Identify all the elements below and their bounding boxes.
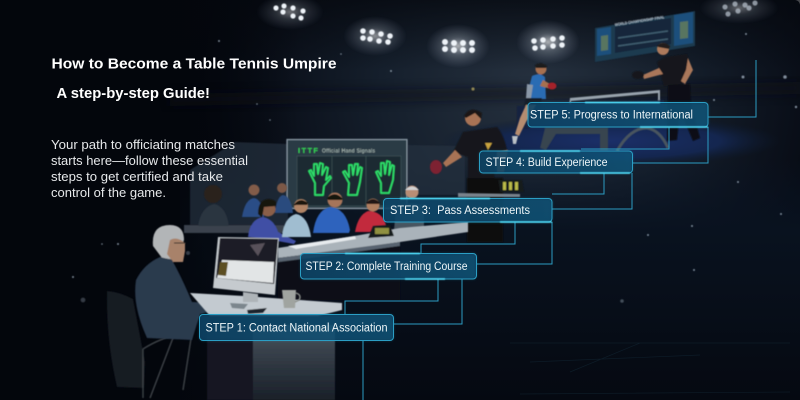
step 5 label: [528, 102, 708, 127]
scoreboard screen: WORLD CHAMPIONSHIP FINAL: [614, 14, 665, 27]
intro text: control of the game.: [51, 186, 166, 200]
step 1 label: STEP 1: Contact National Association: [206, 322, 388, 334]
step 3 label: STEP 3: Pass Assessments: [390, 205, 530, 217]
back wall panels: [190, 142, 465, 225]
step 2 label: [300, 254, 476, 279]
step 5 label: STEP 5: Progress to International: [530, 110, 693, 122]
student 8: [394, 186, 424, 230]
classroom desk: [278, 222, 468, 300]
coffee mug: [282, 290, 300, 308]
subtitle: A step-by-step Guide!: [56, 85, 210, 102]
stadium floodlights: [256, 0, 779, 68]
connector lines: [345, 60, 756, 400]
umpire table with scorer: [458, 180, 524, 197]
student 7: [355, 198, 386, 232]
intro text: starts here—follow these essential: [51, 154, 248, 168]
player in blue shirt: [512, 63, 556, 144]
intro text: Your path to officiating matches: [51, 138, 235, 152]
hand signals board: [287, 140, 407, 208]
table tennis table: [517, 90, 668, 151]
student 3: [275, 183, 293, 213]
seated man at computer: [135, 225, 230, 340]
chair: [107, 291, 192, 398]
umpire standing with paddle: [430, 110, 508, 242]
step 4 label: [480, 151, 632, 173]
step 2 label: STEP 2: Complete Training Course: [306, 261, 468, 273]
student 5: [282, 199, 311, 237]
computer monitor: [213, 237, 279, 302]
step 4 label: STEP 4: Build Experience: [486, 157, 608, 169]
icon: green hands: [309, 161, 394, 195]
student 2: [242, 184, 264, 217]
student 1: [198, 185, 229, 226]
step 3 label: [384, 198, 552, 222]
player in black shirt: [632, 43, 700, 141]
hand signals board: ITTF: [298, 146, 318, 155]
students at classroom table: [184, 183, 424, 244]
title: How to Become a Table Tennis Umpire: [52, 56, 336, 72]
student 6: [313, 192, 350, 233]
hand signals board: Official Hand Signals: [322, 148, 376, 154]
intro text: steps to get certified and take: [51, 170, 223, 184]
student 4: [248, 199, 296, 244]
scoreboard screen: [595, 11, 695, 62]
intro text: [51, 138, 248, 200]
step 1 label: [200, 314, 394, 340]
computer desk: [190, 293, 342, 400]
